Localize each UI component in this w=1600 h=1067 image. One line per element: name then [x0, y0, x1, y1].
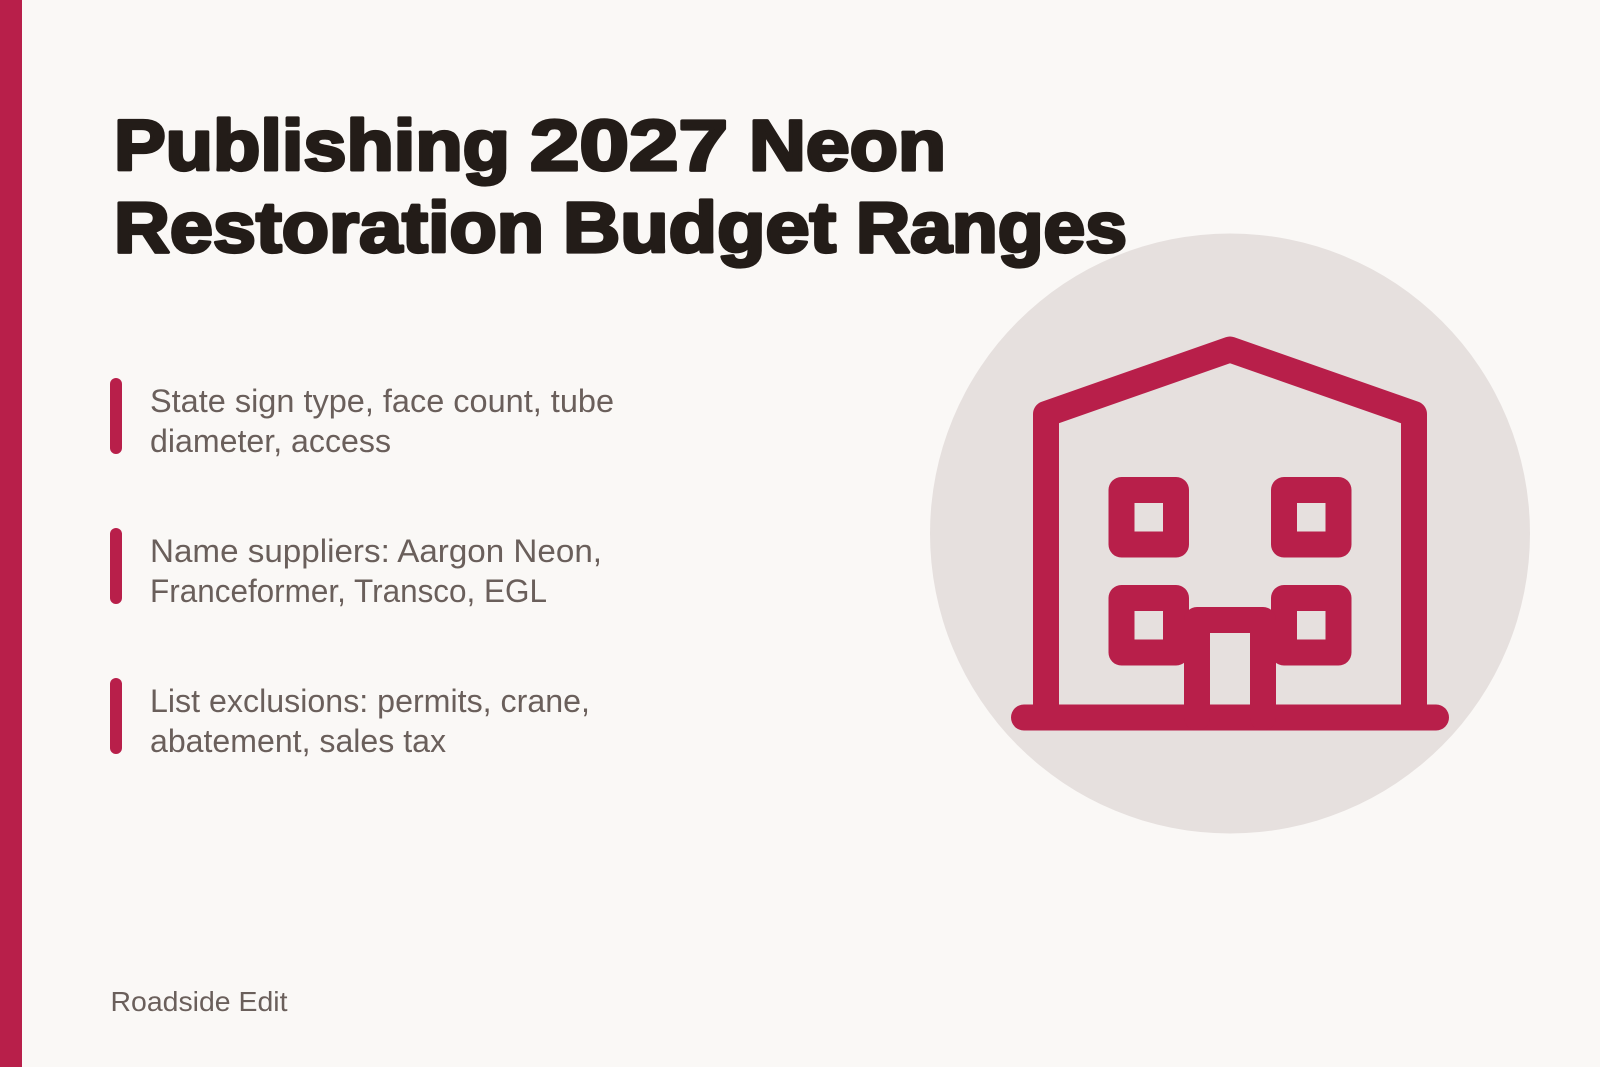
bullet 3: exclusions: abatement, sales tax: [150, 723, 446, 759]
bullet 3: exclusions: List exclusions: permits, crane,: [150, 683, 590, 719]
bullet 1: sign details: State sign type, face count, tube: [150, 383, 614, 419]
left accent bar: [0, 0, 22, 1067]
icon badge: circle with storefront building: [930, 234, 1530, 834]
badge circle: [930, 234, 1530, 834]
bullet 1: sign details: [110, 378, 614, 459]
title: Budget: [563, 189, 836, 268]
title: [114, 107, 1127, 268]
bullet list: [110, 378, 614, 759]
title: Restoration: [114, 189, 544, 268]
bullet 2: suppliers: [110, 528, 602, 609]
bullet 3: exclusions: [110, 678, 590, 759]
bullet 2: suppliers: Franceformer, Transco, EGL: [150, 573, 547, 609]
icon: building: [1024, 350, 1436, 718]
title: Ranges: [856, 189, 1127, 268]
bullet 2: suppliers: Name suppliers: Aargon Neon,: [150, 533, 602, 569]
bullet 1: sign details: diameter, access: [150, 423, 391, 459]
title: Neon: [749, 107, 946, 186]
footer credit: Roadside Edit: [110, 986, 288, 1017]
title: 2027: [530, 107, 728, 186]
title: Publishing: [114, 107, 510, 186]
